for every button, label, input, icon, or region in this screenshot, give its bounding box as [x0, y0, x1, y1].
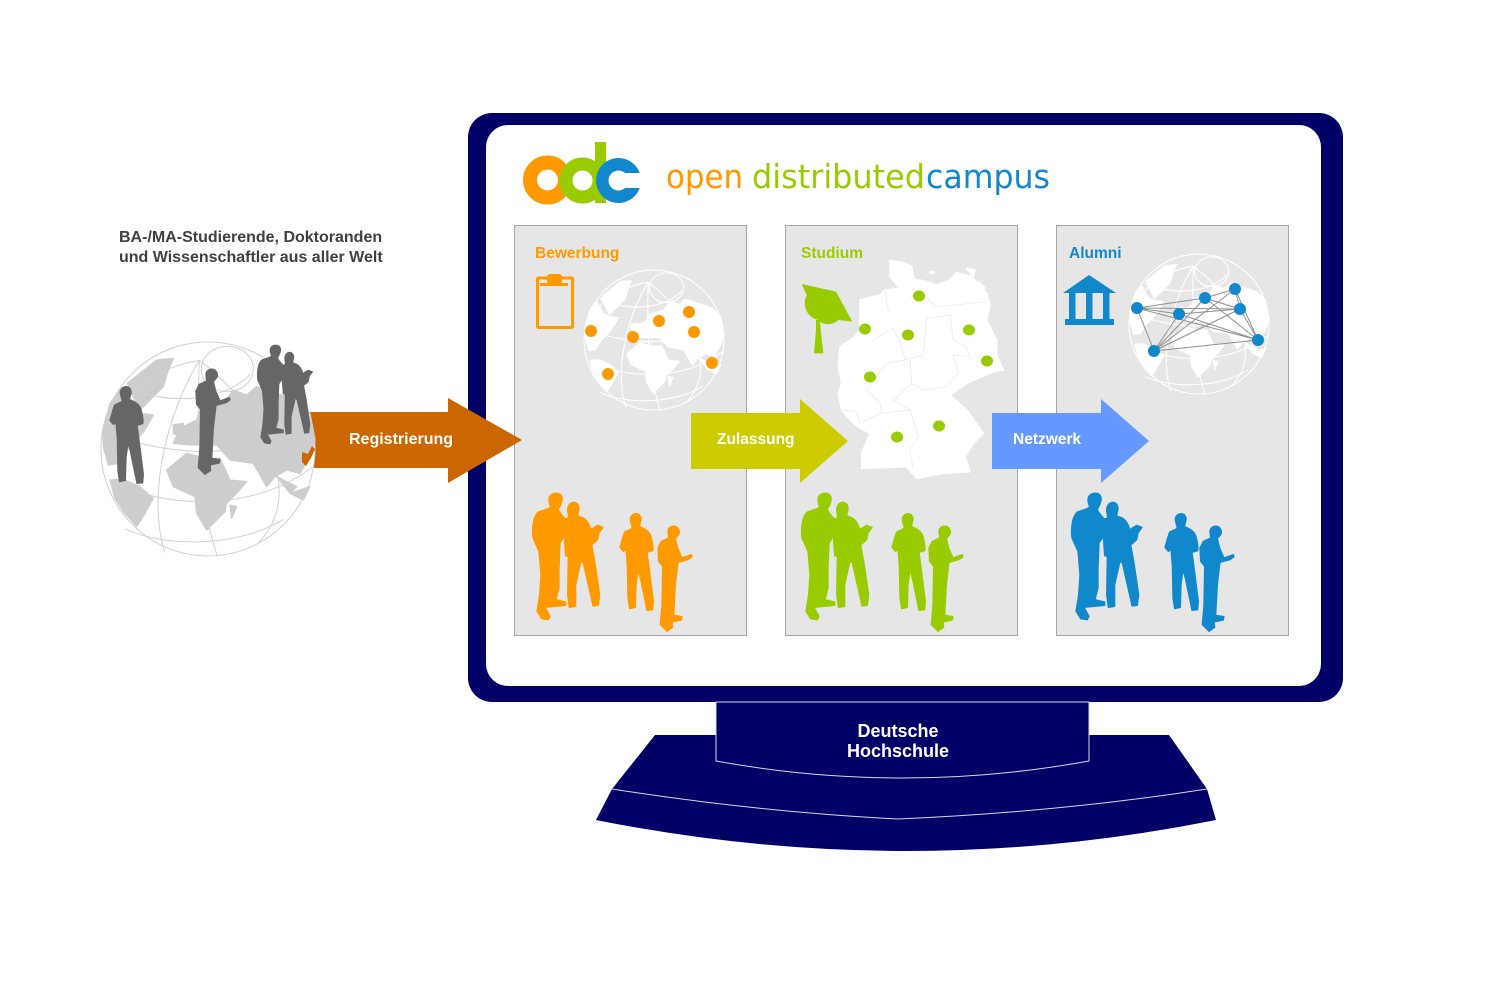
caption: target audience: BA-/MA-Studierende, Doktoranden	[119, 229, 382, 246]
caption: target audience: und Wissenschaftler aus aller Welt	[119, 249, 383, 266]
network globe	[1129, 254, 1269, 394]
map: Germany	[838, 261, 1003, 478]
monitor stand	[596, 702, 1216, 851]
panel: Alumni	[1056, 226, 1288, 636]
logo: odc	[530, 142, 640, 203]
heading: Alumni: Alumni	[1069, 245, 1122, 262]
logo wordmark: distributed	[752, 157, 925, 196]
arrow: Netzwerk	[992, 399, 1149, 483]
monitor stand: Hochschule	[847, 741, 949, 761]
monitor frame	[468, 113, 1343, 702]
panel: Bewerbung	[514, 226, 746, 636]
monitor stand: Deutsche	[857, 721, 939, 741]
icon: graduation cap	[802, 284, 852, 353]
people: blue	[1072, 493, 1234, 631]
logo wordmark: campus	[926, 157, 1050, 196]
arrow: Netzwerk: Netzwerk	[1013, 431, 1081, 448]
logo wordmark: open	[666, 157, 743, 196]
heading: Bewerbung: Bewerbung	[535, 245, 619, 262]
arrow: Zulassung	[691, 399, 848, 483]
heading: Studium: Studium	[801, 245, 863, 262]
panel: Studium	[786, 226, 1018, 636]
arrow: Registrierung	[300, 398, 522, 483]
icon: clipboard	[538, 274, 572, 328]
icon: university building	[1063, 275, 1116, 325]
globe with application dots	[584, 270, 724, 410]
arrow: Zulassung: Zulassung	[717, 431, 795, 448]
globe with people	[101, 342, 315, 556]
people: green	[802, 493, 963, 631]
people: orange	[533, 493, 692, 631]
logo wordmark	[666, 157, 1050, 196]
map dots	[859, 290, 993, 442]
arrow: Registrierung: Registrierung	[349, 431, 453, 448]
